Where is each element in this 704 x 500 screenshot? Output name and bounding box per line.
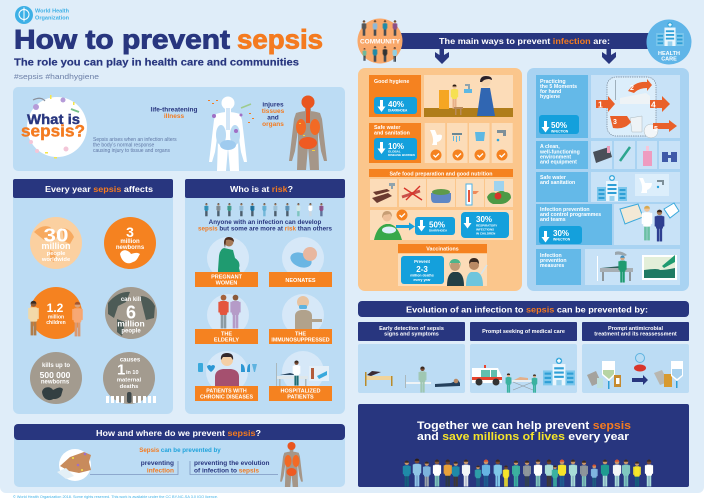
- stat: 1.2 million children: 1.2: [47, 301, 64, 315]
- risk: the immunosuppressed: [269, 294, 332, 344]
- stat: causes 1 in 10 maternal deaths: [103, 352, 156, 404]
- vaccinations: Prevent: [414, 259, 430, 264]
- text: preventing the evolution: of infection to sepsis: [194, 468, 259, 474]
- breastfeeding and stats: DIARRHOEA: [429, 228, 448, 232]
- hashtags: #sepsis #handhygiene: [14, 72, 99, 81]
- label: injures tissues and organs: [262, 102, 285, 128]
- stat: 30 million: worldwide: [41, 257, 71, 263]
- title: How to prevent: [14, 24, 230, 54]
- risk: pregnant women: PREGNANT: [211, 274, 243, 280]
- safe water and sanitation: and sanitation: [374, 130, 410, 136]
- risk: the elderly: [195, 294, 258, 344]
- definition text: causing injury to tissue and organs: [93, 148, 170, 154]
- 5 moments for hand hygiene: [536, 75, 680, 138]
- infection prevention measures: prevention: [540, 258, 567, 264]
- stat: causes 1 in 10 maternal deaths: in 10: [126, 370, 139, 376]
- icon: community circle: COMMUNITY: [360, 38, 401, 46]
- breastfeeding and stats: IN CHILDREN: [476, 232, 495, 236]
- infection prevention and control: INFECTION: [553, 238, 571, 242]
- safe food preparation and good nutrition: [369, 169, 513, 207]
- heading: Every year sepsis affects: [45, 185, 154, 194]
- panel: what is sepsis: [13, 87, 345, 171]
- risk: patients with chronic diseases: PATIENTS WITH: [206, 388, 247, 394]
- 5 moments for hand hygiene: the 5 Moments: [540, 84, 577, 90]
- vaccinations: [398, 244, 487, 286]
- stat: 3 million newborns: million: [120, 239, 140, 245]
- footer copyright: © World Health Organization 2018. Some rights reserved. This work is available under the CC BY-NC-SA 3.0 IGO licence.: [13, 495, 218, 499]
- title: sepsis: [237, 24, 323, 54]
- intro text: [198, 219, 333, 232]
- safe water and sanitation: and sanitation: [540, 180, 575, 186]
- label: injures tissues and organs: tissues: [262, 108, 285, 115]
- label: injures tissues and organs: injures: [262, 102, 284, 108]
- heading: [13, 179, 173, 198]
- risk: the elderly: THE: [221, 332, 232, 338]
- stat: can kill 6 million: can kill: [121, 297, 142, 303]
- breastfeeding and stats: 50%: [429, 220, 445, 230]
- subtitle: The role you can play in health care and communities: [14, 56, 299, 68]
- stat: kills up to 500 000 newborns: newborns: [41, 380, 70, 386]
- risk: patients with chronic diseases: [195, 351, 258, 401]
- figure: healthy body with germs: [208, 96, 254, 171]
- clean environment: and equipment: [540, 160, 577, 166]
- icon: health care circle: HEALTH: [658, 51, 680, 57]
- subheading: Sepsis can be prevented by: [139, 447, 221, 454]
- title: [14, 24, 323, 54]
- figure: body with damaged organs: [289, 96, 327, 170]
- risk: hospitalized patients: HOSPITALIZED: [281, 388, 320, 394]
- stat: 30 million: 30: [44, 226, 68, 246]
- stat: 1.2 million children: million: [48, 314, 64, 320]
- clean environment: well-functioning: [539, 150, 580, 156]
- clean environment: environment: [540, 154, 571, 160]
- vaccinations: million deaths: [410, 274, 434, 278]
- intro text: Anyone with an infection can develop: [209, 219, 321, 226]
- 5 moments for hand hygiene: hygiene: [540, 94, 560, 100]
- icon: community circle: [358, 18, 402, 64]
- stat: causes 1 in 10 maternal deaths: causes: [120, 358, 141, 364]
- heading: How and where do we prevent sepsis ?: [96, 429, 261, 438]
- stat: can kill 6 million: people: [121, 328, 141, 334]
- good hygiene: DIARRHOEA: [388, 108, 408, 112]
- stat: kills up to 500 000 newborns: kills up to: [42, 363, 70, 369]
- infection prevention measures: Infection: [540, 253, 562, 259]
- infection prevention measures: measures: [540, 263, 564, 269]
- arrow: to community: [435, 48, 449, 64]
- breastfeeding and stats: INFECTIONS: [476, 228, 494, 232]
- column: prompt antimicrobial treatment: treatment and its reassessment: [594, 332, 677, 338]
- good hygiene: [369, 75, 513, 117]
- closing text: Together we can help prevent sepsis: [417, 420, 631, 432]
- sepsis badge: What is: [27, 111, 80, 127]
- stat: 30 million: people: [47, 251, 66, 257]
- column: early detection: signs and symptoms: [384, 332, 439, 338]
- stat: 1.2 million children: [28, 287, 83, 339]
- figure: body with organs: [280, 442, 303, 487]
- 5 moments for hand hygiene: Practicing: [540, 79, 566, 85]
- risk: the immunosuppressed: THE: [295, 332, 306, 338]
- safe water and sanitation: GLOBAL: [388, 150, 401, 154]
- banner: main ways to prevent infection: The main ways to prevent infection are:: [439, 36, 610, 46]
- heading: [14, 424, 345, 440]
- risk: neonates: [269, 237, 332, 287]
- closing text: [417, 420, 631, 443]
- stat: 3 million newborns: [104, 217, 156, 269]
- 5 moments for hand hygiene: 1: [598, 100, 603, 110]
- good hygiene: Good hygiene: [374, 79, 409, 85]
- safe water and sanitation: [536, 172, 680, 202]
- infection prevention and control: and teams: [540, 217, 566, 223]
- sepsis badge: [21, 95, 87, 158]
- column: prompt antimicrobial treatment: [582, 322, 689, 393]
- column: prompt seeking of medical care: [470, 322, 577, 393]
- 5 moments for hand hygiene: 4: [651, 100, 656, 110]
- risk: the elderly: ELDERLY: [214, 338, 239, 344]
- logo: World Health Organization: [15, 6, 70, 24]
- breastfeeding and stats: [370, 210, 513, 240]
- people row: [204, 203, 323, 216]
- infection prevention and control: Infection prevention: [540, 207, 590, 213]
- safe water and sanitation: Safe water: [540, 175, 566, 181]
- definition text: the body’s normal response: [93, 142, 155, 148]
- column: early detection: Early detection of sepsis: [379, 326, 444, 332]
- icon: health care circle: [646, 20, 692, 64]
- 5 moments for hand hygiene: 5: [654, 126, 658, 133]
- crowd of people: [403, 459, 653, 487]
- risk: hospitalized patients: [269, 351, 332, 401]
- sepsis badge: sepsis?: [21, 122, 85, 140]
- stat: kills up to 500 000 newborns: 500 000: [40, 370, 71, 380]
- panel: health care measures: [527, 68, 689, 291]
- stat: can kill 6 million: million: [117, 318, 145, 328]
- stat: 3 million newborns: 3: [126, 224, 134, 240]
- heading: evolution of an infection: [358, 301, 689, 317]
- heading: Who is at risk?: [230, 185, 293, 194]
- icon: health care circle: CARE: [661, 56, 677, 62]
- heading: [185, 179, 345, 198]
- text: preventing the evolution: [190, 460, 278, 474]
- stat: 3 million newborns: newborns: [116, 245, 145, 251]
- panel: community measures: [358, 68, 522, 291]
- risk: patients with chronic diseases: CHRONIC DISEASES: [200, 394, 253, 400]
- 5 moments for hand hygiene: INFECTION: [551, 130, 569, 134]
- infection prevention measures: [536, 249, 680, 285]
- vaccinations: every year: [413, 278, 431, 282]
- stat: can kill 6 million: [105, 287, 157, 339]
- stat: causes 1 in 10 maternal deaths: deaths: [120, 384, 138, 390]
- risk: hospitalized patients: PATIENTS: [287, 394, 314, 400]
- text: preventing infection: [90, 460, 178, 474]
- clean environment: A clean,: [540, 144, 560, 150]
- heading: evolution of an infection: Evolution of an infection to sepsis can be prevented by:: [406, 306, 648, 314]
- stat: 30 million: [30, 217, 82, 269]
- text: preventing infection: preventing: [141, 460, 174, 467]
- 5 moments for hand hygiene: 2: [630, 85, 634, 92]
- stat: 30 million: million: [42, 241, 70, 251]
- breastfeeding and stats: RESPIRATORY: [476, 224, 497, 228]
- safe water and sanitation: 10%: [388, 142, 404, 151]
- panel: who is at risk: [185, 179, 345, 414]
- risk: pregnant women: WOMEN: [216, 280, 237, 286]
- 5 moments for hand hygiene: for hand: [540, 89, 561, 95]
- risk: neonates: NEONATES: [285, 278, 316, 284]
- column: prompt seeking of medical care: Prompt seeking of medical care: [482, 329, 565, 335]
- label: life-threatening illness: illness: [164, 113, 185, 120]
- label: injures tissues and organs: and: [267, 114, 279, 122]
- 5 moments for hand hygiene: 50%: [551, 121, 567, 130]
- safe water and sanitation: Safe water: [374, 125, 400, 131]
- logo: World Health Organization: World Health: [35, 8, 70, 14]
- intro text: sepsis but some are more at risk than others: [198, 226, 333, 232]
- column: early detection: [358, 322, 465, 393]
- label: life-threatening illness: life-threatening: [151, 106, 198, 114]
- arrow: to health care: [602, 48, 616, 64]
- icon: washing hands: [57, 449, 91, 481]
- definition text: [93, 137, 177, 154]
- label: injures tissues and organs: organs: [262, 121, 284, 128]
- infection prevention and control: 30%: [553, 229, 569, 238]
- stat: can kill 6 million: 6: [126, 302, 136, 322]
- text: preventing infection: infection: [147, 468, 174, 474]
- stat: 1.2 million children: children: [46, 320, 66, 326]
- good hygiene: 40%: [388, 100, 404, 109]
- infection prevention and control: and control programmes: [540, 212, 601, 218]
- clean environment: [536, 141, 680, 169]
- infection prevention and control: [536, 203, 680, 245]
- panel: closing message: [358, 404, 689, 487]
- column: prompt antimicrobial treatment: Prompt antimicrobial: [608, 326, 663, 332]
- 5 moments for hand hygiene: 3: [613, 119, 617, 126]
- risk: pregnant women: [195, 237, 258, 287]
- risk: the immunosuppressed: IMMUNOSUPPRESSED: [271, 338, 330, 344]
- definition text: Sepsis arises when an infection alters: [93, 137, 177, 143]
- panel: how and where: [14, 424, 345, 487]
- stat: causes 1 in 10 maternal deaths: maternal: [117, 378, 141, 384]
- stat: causes 1 in 10 maternal deaths: 1: [117, 362, 125, 378]
- closing text: and save millions of lives every year: [417, 431, 630, 443]
- safe water and sanitation: DISEASE BURDEN: [388, 153, 415, 157]
- panel: every year sepsis affects: [13, 179, 173, 414]
- breastfeeding and stats: 30%: [476, 215, 492, 224]
- text: preventing the evolution: preventing the evolution: [194, 460, 270, 467]
- stat: kills up to 500 000 newborns: [30, 352, 82, 404]
- vaccinations: 2-3: [416, 265, 428, 274]
- logo: World Health Organization: Organization: [35, 16, 70, 22]
- banner: main ways to prevent infection: [395, 33, 653, 49]
- vaccinations: Vaccinations: [426, 246, 459, 252]
- safe food preparation and good nutrition: Safe food preparation and good nutrition: [390, 172, 492, 178]
- label: life-threatening illness: [151, 106, 198, 120]
- safe water and sanitation: [369, 123, 513, 163]
